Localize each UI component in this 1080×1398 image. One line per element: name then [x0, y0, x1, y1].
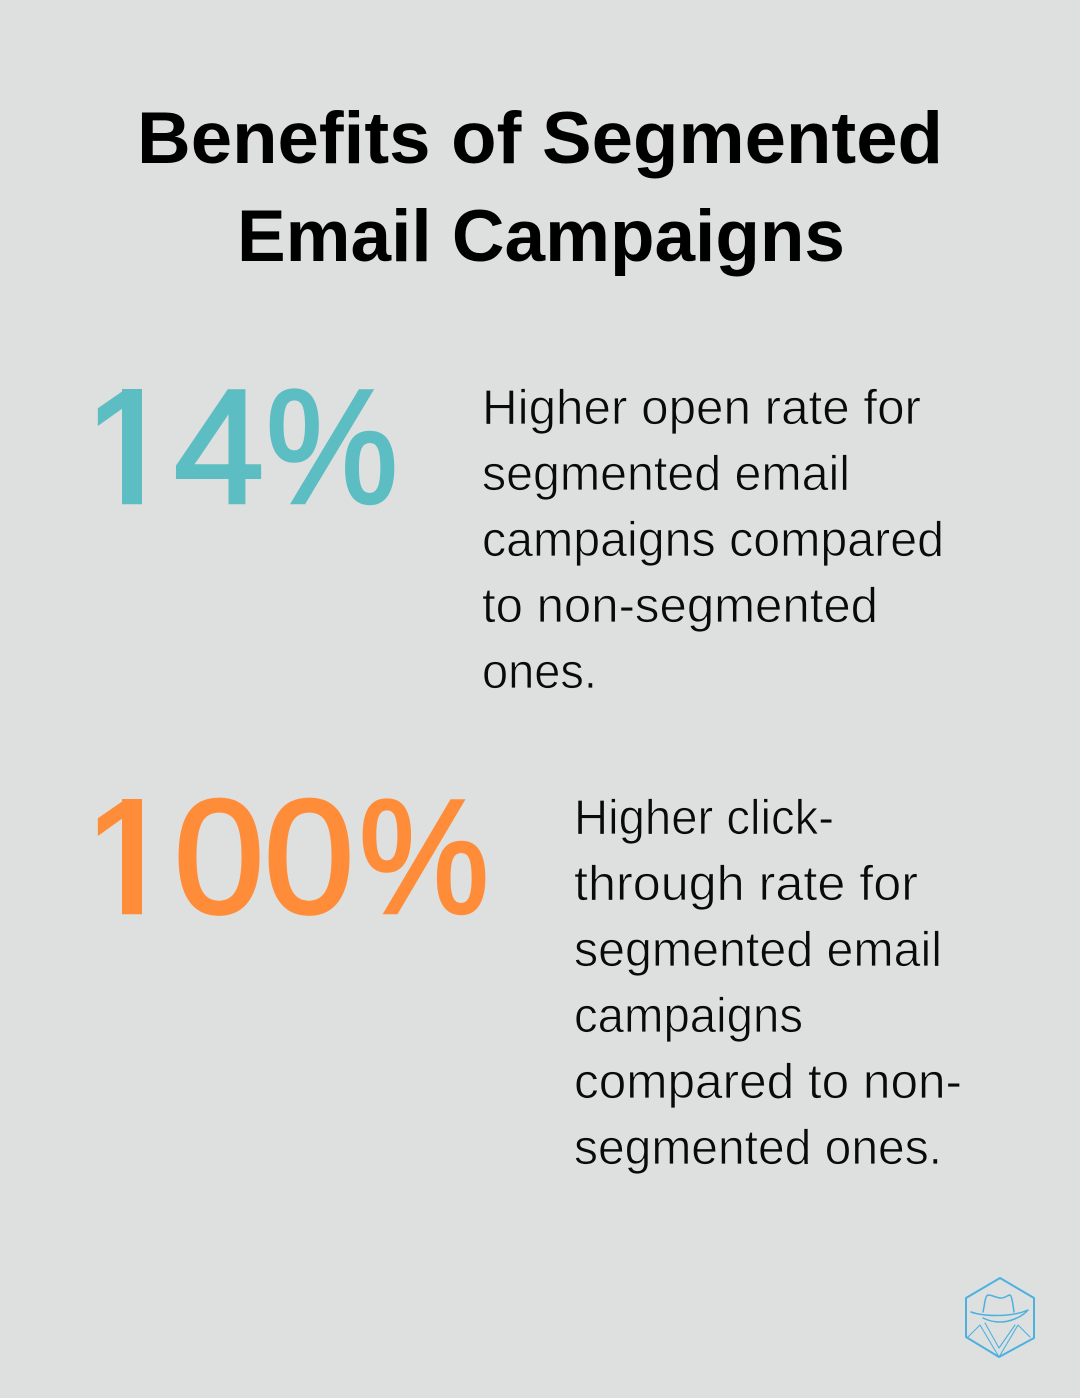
- text block: open rate description: ones.: [482, 645, 597, 699]
- title: Email Campaigns: [237, 196, 845, 277]
- stat: 14%: 14: [84, 356, 264, 538]
- text block: click-through rate description: compared to non-: [574, 1055, 962, 1109]
- text block: open rate description: campaigns compared: [482, 513, 944, 567]
- stat: 14%: %: [266, 356, 398, 538]
- text block: open rate description: segmented email: [482, 447, 850, 501]
- text block: click-through rate description: campaigns: [574, 989, 803, 1043]
- stat: 100%: [80, 766, 489, 948]
- stat: 100%: 100: [84, 766, 354, 948]
- stat: 14%: [80, 356, 398, 538]
- text block: click-through rate description: [574, 791, 962, 1175]
- text block: open rate description: to non-segmented: [482, 579, 878, 633]
- icon: hexagon logo with hat: [966, 1278, 1034, 1357]
- text block: click-through rate description: Higher click-: [574, 791, 834, 845]
- text block: open rate description: Higher open rate for: [482, 381, 921, 435]
- stat: 100%: %: [359, 766, 489, 948]
- text block: click-through rate description: segmented ones.: [574, 1121, 942, 1175]
- title: [137, 98, 943, 277]
- title: Benefits of Segmented: [137, 98, 943, 179]
- text block: click-through rate description: segmented email: [574, 923, 942, 977]
- text block: click-through rate description: through rate for: [574, 857, 918, 911]
- text block: open rate description: [482, 381, 944, 699]
